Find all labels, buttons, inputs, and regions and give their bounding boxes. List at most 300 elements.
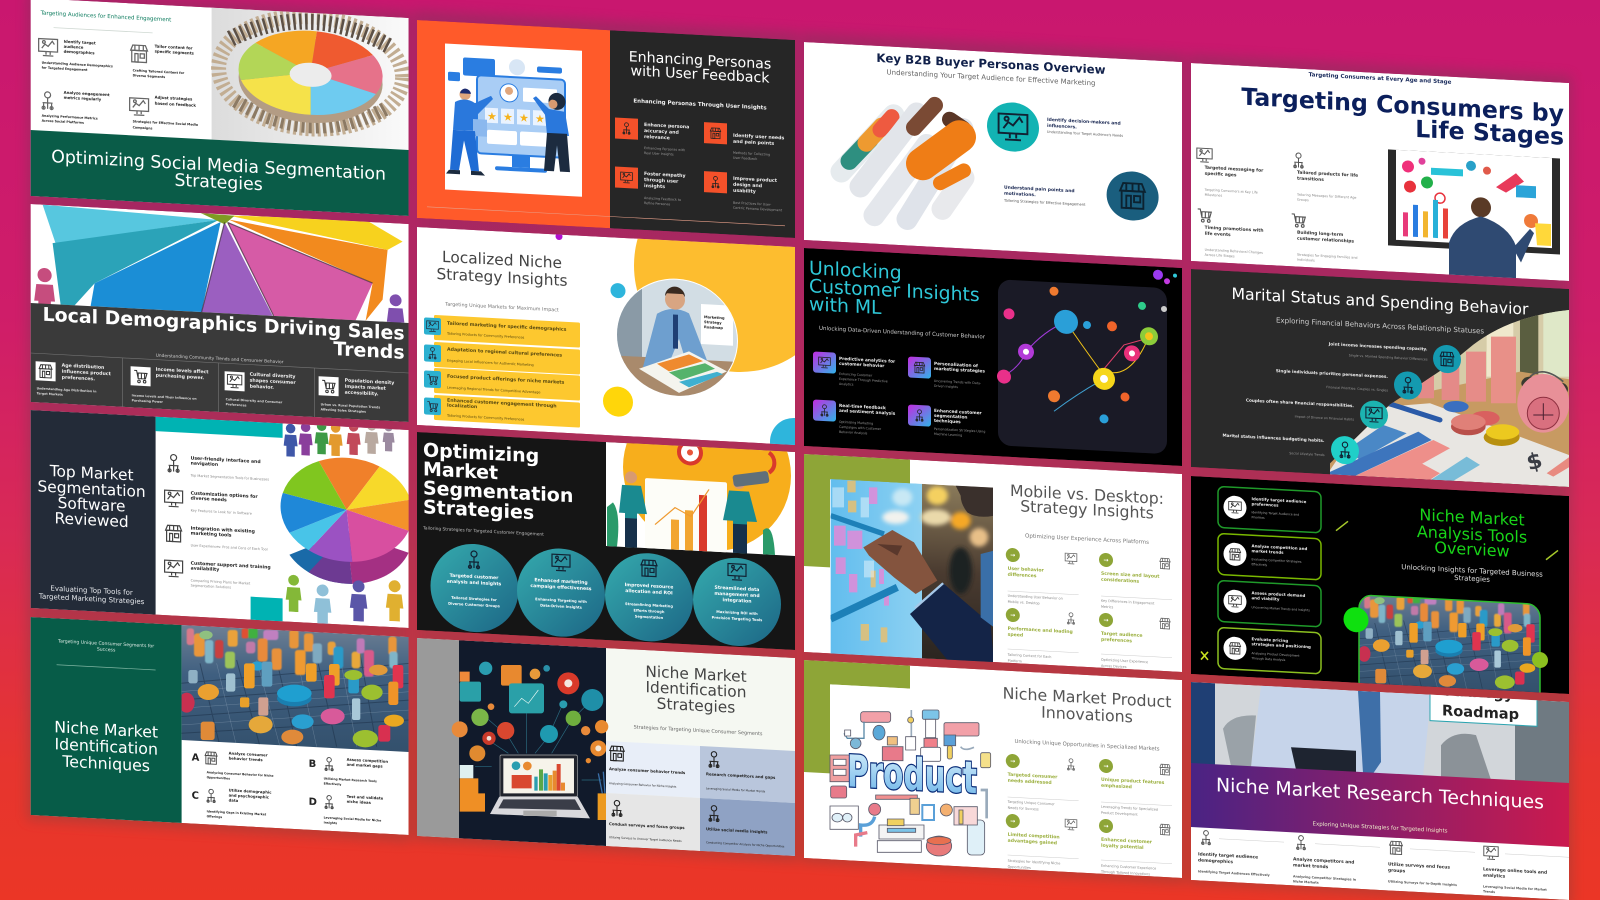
lettered techniques: niche ideas — [347, 799, 372, 805]
tool card: competition — [1218, 533, 1321, 580]
strategy quadrants: Research competitors and gaps — [706, 771, 776, 780]
circle: data management: Maximizing ROI with — [716, 610, 758, 616]
yellow strategy bars: Tailoring Products for Community Preferences — [446, 414, 525, 422]
image: businessman with roadmap sign: Roadmap — [1442, 702, 1519, 723]
subtitle: Targeting Unique Consumer Segments for — [57, 638, 154, 650]
tool card: audience preferences: preferences — [1252, 501, 1279, 508]
life stage items: Milestones — [1205, 193, 1222, 198]
image: man with strategy roadmap: Roadmap — [704, 325, 723, 330]
item: joint income — [1328, 339, 1461, 374]
image: hand on touchscreen — [831, 472, 994, 673]
item: couples: Couples often share financial responsibilities. — [1246, 398, 1354, 408]
innovation items: Leveraging Trends for Specialized — [1101, 805, 1158, 812]
research method columns: demographics — [1198, 857, 1233, 865]
title: Analysis Tools — [1417, 522, 1527, 547]
subtitle: Targeting Consumers at Every Age and Stage — [1309, 72, 1452, 86]
circle: resource allocation: Improved resource — [625, 582, 673, 591]
slide: Optimizing Market Segmentation Strategies — [417, 432, 795, 650]
yellow strategy bars — [424, 314, 580, 428]
slide: Marital Status and Spending Behavior — [1191, 266, 1573, 513]
circle: campaign effectiveness: campaign effectiveness — [530, 583, 592, 592]
feedback items: Analyzing Feedback to — [644, 196, 681, 202]
yellow strategy bars: localization — [447, 403, 477, 410]
four demographic columns: Cultural Diversity and Consumer — [226, 397, 283, 404]
innovation items: Product Development — [1101, 811, 1138, 817]
title: Marital Status and Spending Behavior — [1231, 284, 1529, 319]
image: network of data nodes — [997, 279, 1167, 454]
tool card: pricing: Evaluate pricing — [1252, 636, 1288, 643]
subtitle: Targeting Unique Markets for Maximum Impact — [444, 301, 559, 314]
life stage items: Tailored products for life — [1297, 170, 1358, 179]
dark title band — [31, 303, 409, 422]
title — [645, 663, 747, 717]
title — [438, 250, 567, 288]
image: coins, bars and clock: $ — [1524, 448, 1545, 476]
software feature list: Integration with existing — [191, 525, 255, 535]
innovation items: Targeting Unique Consumer — [1007, 800, 1055, 806]
innovation items: Through Tailored Innovations — [1100, 870, 1150, 876]
innovation items: Targeted consumer — [1008, 772, 1058, 780]
image: man with strategy roadmap: Strategy — [704, 320, 722, 325]
subtitle: Strategies — [1454, 574, 1490, 584]
image: product machinery doodles — [830, 684, 993, 868]
comparison items: Screen size and layout — [1101, 571, 1160, 580]
lettered techniques: data — [229, 797, 239, 803]
subtitle — [38, 585, 144, 605]
comparison items: Metrics — [1101, 605, 1114, 609]
insight items: Driven Insights — [934, 384, 958, 389]
accent dots — [556, 234, 795, 445]
four demographic columns: purchasing power. — [156, 373, 204, 381]
slide: Targeting Consumers by Life Stages — [1191, 63, 1569, 281]
image: people reviewing user feedback: ★ — [487, 110, 497, 123]
yellow strategy bars: Adaptation to regional cultural preferences — [447, 347, 562, 359]
insight items: Uncovering Trends with Data- — [934, 379, 981, 385]
title: Optimizing — [423, 439, 539, 467]
title — [1010, 481, 1164, 523]
slide: Niche Market Identification Strategies — [417, 638, 795, 856]
four demographic columns: Population density — [345, 378, 394, 386]
title: Localized Niche — [442, 248, 562, 272]
life stage items: Targeting Consumers at Key Life — [1204, 188, 1258, 195]
yellow strategy bars: Engaging Local Influencers for Authentic Marketing — [447, 359, 534, 367]
circle: data management: integration — [723, 597, 751, 605]
yellow strategy bars: Tailored marketing for specific demographics — [447, 321, 567, 333]
slide: Niche Market Identification Techniques — [30, 617, 409, 835]
lettered techniques: A — [192, 753, 200, 764]
feedback items: accuracy and — [644, 128, 679, 136]
software feature list: diverse needs — [191, 495, 227, 503]
life stage items — [1197, 148, 1358, 265]
title: Niche Market Research Techniques — [1216, 774, 1544, 814]
four demographic columns: Understanding Age Distribution in — [37, 386, 96, 393]
subtitle — [57, 638, 154, 656]
software feature list: Comparing Pricing Plans for Market — [191, 578, 251, 586]
four demographic columns: Affecting Sales Strategies — [321, 407, 366, 414]
comparison items: considerations — [1101, 577, 1139, 585]
title: Trends — [333, 338, 405, 364]
title: Innovations — [1041, 703, 1133, 726]
innovation items: → — [1010, 818, 1015, 825]
decorative yellow circle — [634, 238, 795, 372]
slide: Niche Market Product Innovations — [804, 660, 1182, 878]
software feature list: Segmentation Solutions — [191, 583, 231, 590]
innovation items: Strategies for Identifying Niche — [1008, 859, 1060, 866]
comparison items: Key Differences in Engagement — [1101, 599, 1155, 606]
insight items: segmentation — [934, 413, 967, 421]
lettered techniques: Effectively — [324, 782, 341, 786]
pain points text: motivations. — [1004, 191, 1036, 198]
teal circle icon — [987, 101, 1039, 153]
innovation items: loyalty potential — [1101, 843, 1144, 851]
four demographic columns: shapes consumer — [250, 378, 296, 386]
strategy quadrants: Utilizing Surveys to Uncover Target Audience Needs — [609, 835, 682, 843]
four demographic columns: accessibility. — [345, 390, 379, 397]
feedback items: insights — [644, 183, 665, 190]
tool card: pricing: Analyzing Product Development — [1252, 651, 1300, 658]
subtitle: Optimizing User Experience Across Platforms — [1025, 533, 1149, 546]
software feature list: marketing tools — [191, 530, 232, 539]
slide: Local Demographics Driving Sales Trends — [31, 202, 409, 422]
circle: resource allocation: allocation and ROI — [625, 588, 673, 597]
comparison items: speed — [1008, 632, 1023, 639]
four tactic items: Analyzing Performance Metrics — [42, 114, 98, 121]
lettered techniques: Analyze consumer — [229, 750, 268, 758]
title: Reviewed — [55, 509, 129, 531]
image: people around a pie chart — [212, 8, 409, 150]
feedback items: usability — [733, 188, 756, 195]
circle: targeted analysis: analysis and insights — [447, 579, 502, 587]
tool card: demand — [1218, 580, 1321, 627]
four tactic items: Strategies for Effective Social Media — [133, 119, 198, 127]
comparison items: Platform — [1008, 659, 1023, 664]
comparison items: preferences — [1101, 637, 1132, 644]
life stage items: Understanding Behavioral Changes — [1205, 248, 1263, 255]
four tactic items: Crafting Tailored Content for — [133, 68, 185, 75]
pain points text — [1003, 185, 1086, 207]
image: businessman with roadmap sign — [1191, 669, 1569, 784]
pain points text: Tailoring Strategies for Effective Engagement — [1003, 199, 1086, 207]
circle: data management — [693, 556, 781, 648]
title: Segmentation — [37, 477, 146, 501]
image: diagonal branding stripes — [841, 100, 964, 222]
four tactic items — [39, 37, 198, 133]
yellow strategy bars: Tailoring Products for Community Preferences — [446, 332, 525, 340]
circle: targeted analysis: Tailored Strategies for — [451, 596, 497, 602]
insight items: techniques — [934, 418, 961, 425]
image: product machinery doodles: Product — [847, 746, 977, 804]
research method columns: Identifying Target Audiences Effectively — [1198, 869, 1271, 877]
image: people reviewing user feedback — [445, 43, 582, 197]
subtitle: Targeted Marketing Strategies — [38, 592, 145, 606]
four demographic columns: Preferences — [226, 402, 247, 407]
subtitle: Unlocking Unique Opportunities in Specialized Markets — [1014, 739, 1160, 753]
innovation items: Needs for Success — [1008, 806, 1039, 811]
title: Niche Market — [645, 663, 747, 686]
insight items: Analytics — [839, 382, 854, 387]
four tactic items: Tailor content for — [155, 44, 193, 51]
innovation items: Enhanced customer — [1101, 837, 1153, 845]
four tactic items: based on feedback — [155, 101, 196, 108]
insight items: marketing strategies — [934, 366, 985, 375]
innovation items: Limited competition — [1008, 832, 1060, 841]
strategy quadrants: Conducting Competitor Analysis for Niche Opportunities — [706, 840, 785, 848]
lettered techniques: B — [309, 759, 316, 770]
item: budgeting — [1222, 430, 1359, 465]
circle: resource allocation: Efforts through — [634, 608, 665, 614]
four demographic columns: Income levels affect — [156, 367, 209, 375]
title: Strategies — [174, 171, 263, 195]
lettered techniques: Utilizing Market Research Tools — [324, 777, 377, 783]
slide: Key B2B Buyer Personas Overview — [804, 42, 1182, 260]
strategy quadrants — [606, 741, 795, 856]
title — [630, 51, 771, 83]
decision makers text: influencers. — [1047, 123, 1077, 130]
title: Unlocking — [809, 258, 902, 284]
innovation items: → — [1010, 758, 1015, 765]
tool card: competition: Analyze competition and — [1252, 543, 1307, 551]
lettered techniques: Leveraging Social Media for Niche — [324, 816, 381, 823]
image: man at a data wall — [1388, 149, 1560, 281]
subtitle: Tailoring Strategies for Targeted Customer Engagement — [422, 525, 544, 538]
title: Strategy Insights — [436, 265, 568, 290]
decision makers text: Understanding Your Target Audience's Needs — [1047, 130, 1123, 138]
feedback items: Foster empathy — [644, 171, 686, 179]
accent shapes — [1201, 514, 1558, 678]
feedback items — [615, 117, 784, 212]
lettered techniques — [192, 749, 388, 828]
green title band — [31, 130, 409, 216]
image: pie chart with figures — [281, 416, 413, 630]
title — [54, 717, 158, 776]
lettered techniques: Identifying Gaps in Existing Market — [207, 809, 267, 816]
lettered techniques: behavior trends — [229, 755, 263, 762]
tool card: pricing: strategies and positioning — [1252, 641, 1311, 649]
feedback items: Identify user needs — [733, 133, 784, 141]
research method columns — [1198, 830, 1569, 898]
comparison items: Across Devices — [1101, 664, 1127, 669]
decision makers text: Identify decision-makers and — [1047, 117, 1121, 127]
tool card: pricing — [1218, 627, 1321, 674]
life stage items: Building long-term — [1297, 230, 1344, 238]
subtitle: Unlocking Data-Driven Understanding of Customer Behavior — [819, 326, 986, 341]
software feature list: Customization options for — [191, 490, 258, 500]
title: Techniques — [61, 752, 150, 775]
four demographic columns: behavior. — [250, 384, 274, 391]
subtitle — [1401, 563, 1543, 587]
four demographic columns: influences product — [62, 369, 112, 377]
image: coins, bars and clock — [1323, 273, 1573, 513]
subtitle: Understanding Your Target Audience for Effective Marketing — [887, 68, 1095, 87]
life stage items: Strategies for Engaging Families and — [1297, 253, 1358, 260]
title — [424, 442, 572, 522]
insight items: Enhancing Customer — [839, 372, 873, 378]
image: people reviewing user feedback: ★ — [535, 112, 545, 126]
image: laptop with connected icons — [452, 640, 608, 846]
subtitle: Strategies for Targeting Unique Consumer Segments — [634, 724, 763, 737]
teal accents — [156, 417, 283, 621]
title — [809, 258, 980, 324]
yellow strategy bars: Enhanced customer engagement through — [447, 398, 557, 409]
title: Strategies — [423, 496, 534, 524]
software feature list: navigation — [191, 460, 218, 468]
circle: data management: management and — [714, 591, 760, 599]
insight items: and sentiment analysis — [839, 408, 896, 417]
feedback items: Refine Personas — [644, 201, 670, 206]
slide: Enhancing Personas with User Feedback — [417, 20, 795, 238]
title: Overview — [1434, 538, 1510, 561]
comparison items: → — [1103, 617, 1109, 624]
decision makers text — [1047, 117, 1123, 138]
image: market pieces in a rounded frame — [1356, 571, 1545, 705]
research method columns: Leveraging Social Media for Market — [1483, 884, 1547, 892]
comparison items: Tailoring Content for Each — [1007, 653, 1051, 659]
tool card: demand: Uncovering Market Trends and Insights — [1252, 605, 1310, 612]
lettered techniques: Assess competition — [347, 757, 388, 764]
subtitle: Exploring Financial Behaviors Across Relationship Statuses — [1276, 315, 1484, 336]
feedback items: Methods for Collecting — [733, 151, 770, 157]
green accent block — [804, 454, 910, 572]
image: market pieces on a grid — [177, 597, 417, 766]
four tactic items: specific segments — [155, 49, 195, 56]
comparison items: → — [1010, 612, 1015, 619]
title — [1417, 505, 1527, 562]
life stage items: Timing promotions with — [1205, 225, 1264, 234]
slide: Localized Niche Strategy Insights — [417, 227, 795, 445]
software feature list: availability — [191, 565, 219, 573]
innovation items: emphasized — [1101, 783, 1132, 790]
title: Customer Insights — [809, 276, 980, 306]
title: Key B2B Buyer Personas Overview — [876, 51, 1106, 77]
research method columns: Niche Markets — [1293, 879, 1319, 885]
innovation items — [1006, 754, 1172, 877]
lettered techniques: and psychographic — [229, 792, 269, 800]
item: budgeting: Marital status influences budgeting habits. — [1222, 433, 1325, 443]
four demographic columns: impacts market — [345, 384, 387, 392]
tool card: audience preferences: Priorities — [1252, 515, 1265, 520]
feedback items: Real User Insights — [644, 151, 674, 157]
slide: Top Market Segmentation Software Reviewed — [31, 403, 413, 630]
feedback items: Improve product — [733, 176, 778, 184]
four tactic items: audience — [64, 44, 84, 50]
feedback items: and pain points — [733, 139, 774, 147]
software feature list: Top Market Segmentation Tools for Businesses — [190, 473, 269, 482]
feedback items: Best Practices for User- — [733, 201, 772, 207]
pain points text: Understand pain points and — [1004, 185, 1075, 194]
research method columns: Trends — [1483, 889, 1495, 894]
subtitle: Unlocking Insights for Targeted Business — [1401, 563, 1543, 579]
title — [44, 307, 404, 359]
comparison items: Understanding User Behavior on — [1008, 594, 1063, 601]
comparison items: Optimizing User Experience — [1101, 658, 1148, 664]
image: people reviewing user feedback: ★ — [503, 111, 513, 124]
four demographic columns: preferences. — [62, 375, 95, 382]
tool card: audience preferences — [1218, 486, 1321, 533]
item: single individuals: Financial Priorities: Couples vs. Singles — [1326, 385, 1388, 392]
circle: resource allocation: Streamlining Marketing — [625, 602, 673, 609]
circle: campaign effectiveness — [517, 546, 605, 639]
insight items: Optimizing Marketing — [839, 420, 873, 426]
item: single individuals: Single individuals prioritize personal expenses. — [1276, 368, 1388, 379]
innovation items: Enhancing Customer Experience — [1101, 864, 1156, 871]
comparison items: Target audience — [1101, 631, 1143, 639]
comparison items: differences — [1008, 572, 1037, 579]
title: Strategy Insights — [1020, 496, 1154, 523]
lettered techniques: Insights — [324, 821, 337, 825]
title: Identification — [54, 734, 158, 759]
four demographic columns: Target Markets — [37, 391, 63, 397]
subtitle: Understanding Community Trends and Consumer Behavior — [156, 353, 284, 365]
innovation items: needs addressed — [1008, 778, 1052, 786]
lettered techniques: Opportunities — [207, 775, 230, 781]
four demographic columns: Age distribution — [62, 363, 104, 371]
lettered techniques: Utilize demographic — [229, 787, 271, 795]
insight items: Personalization of — [934, 361, 978, 369]
subtitle: Targeting Audiences for Enhanced Engagement — [40, 10, 172, 23]
four tactic items: Campaigns — [133, 125, 152, 130]
title: with ML — [809, 294, 882, 319]
comparison items — [1006, 548, 1172, 671]
software feature list: Key Features to Look for in Software — [191, 508, 252, 516]
life stage items: specific ages — [1205, 171, 1237, 178]
four tactic items: Analyze engagement — [64, 90, 110, 97]
feedback items: User Feedback — [733, 156, 757, 161]
comparison items: → — [1103, 557, 1109, 564]
strategy quadrants: Analyzing Consumer Behavior for Niche Insights — [609, 781, 677, 789]
tool card: competition: Effectively — [1252, 562, 1267, 567]
strategy quadrants: Conduct surveys and focus groups — [609, 821, 685, 830]
research method columns: analytics — [1483, 872, 1506, 880]
strategy quadrants: Utilize social media insights — [706, 826, 768, 835]
insight items: Campaigns with Customer — [839, 425, 882, 431]
life stage items: transitions — [1297, 176, 1324, 183]
innovation items: Opportunities — [1008, 865, 1031, 870]
four tactic items: for Targeted Engagement — [42, 66, 88, 72]
item: couples — [1246, 394, 1388, 429]
feedback items: relevance — [644, 134, 670, 141]
four demographic columns: Purchasing Power — [132, 398, 163, 404]
title: Life Stages — [1415, 115, 1564, 151]
title: Targeting Consumers by — [1241, 83, 1564, 128]
research method columns: market trends — [1293, 862, 1329, 870]
subtitle: Success — [97, 647, 116, 654]
feedback items: design and — [733, 182, 762, 189]
software feature list: User Experiences: Pros and Cons of Each Tool — [191, 543, 268, 552]
four tactic items: metrics regularly — [64, 95, 102, 102]
life stage items: Tailoring Messages for Different Age — [1296, 193, 1356, 200]
research method columns: Analyzing Competitor Strategies in — [1293, 874, 1357, 882]
item: couples: Impact of Divorce on Financial Habits — [1295, 414, 1354, 422]
title: Market — [423, 458, 498, 484]
title: Niche Market — [54, 717, 158, 742]
comparison items: → — [1010, 552, 1015, 559]
subtitle: Exploring Unique Strategies for Targeted Insights — [1313, 821, 1448, 835]
image: people reviewing user feedback: ★ — [519, 111, 529, 125]
software feature list: User-friendly interface and — [191, 455, 261, 465]
feedback items: Centric Persona Development — [733, 206, 783, 212]
four tactic items: demographics — [64, 49, 95, 55]
item: joint income: Single vs. Married Spending Behavior Differences — [1349, 353, 1428, 362]
slide: Niche Market Research Techniques — [1191, 669, 1569, 900]
title: Segmentation — [423, 477, 573, 507]
item: single individuals — [1276, 364, 1422, 400]
circle: targeted analysis: Targeted customer — [450, 573, 499, 581]
insight items: Experience Through Predictive — [839, 377, 888, 383]
feedback items: Enhance persona — [644, 122, 689, 130]
green side panel — [31, 617, 182, 823]
insight items: customer behavior — [839, 361, 885, 369]
lettered techniques: Analyzing Consumer Behavior for Niche — [207, 770, 274, 778]
